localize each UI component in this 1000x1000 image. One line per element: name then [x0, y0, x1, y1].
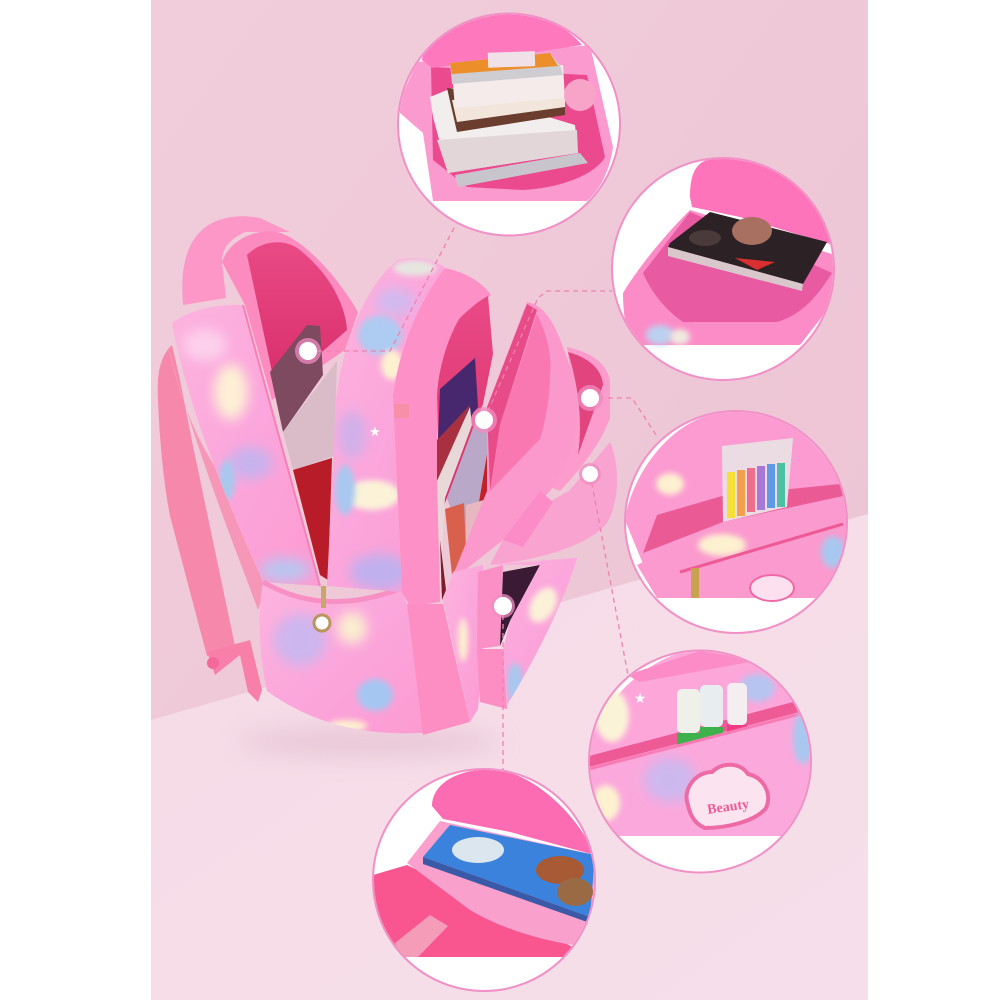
velcro strip — [395, 915, 448, 957]
middle compartment books — [437, 358, 510, 600]
book — [423, 825, 595, 923]
background panel — [151, 0, 868, 1000]
decorative star: ★ — [369, 425, 381, 440]
star: ★ — [634, 691, 646, 707]
pen set — [722, 438, 793, 522]
front compartment opening — [500, 565, 540, 646]
rear compartment — [222, 231, 358, 400]
front compartment rim — [477, 565, 503, 649]
detail circle: main compartment books — [398, 13, 620, 236]
marker dots — [295, 338, 603, 618]
zipper pull — [314, 586, 330, 631]
floor shadow — [240, 728, 500, 756]
detail circle: front pocket book — [373, 769, 595, 991]
logo patch — [687, 765, 768, 828]
front strip — [477, 649, 507, 709]
middle compartment fabric panel — [327, 258, 445, 592]
strap tab — [394, 404, 409, 418]
middle compartment interior — [437, 296, 493, 516]
backpack — [158, 216, 617, 756]
connector lines — [308, 226, 658, 770]
front pocket flap — [490, 442, 617, 565]
rear compartment books — [270, 325, 337, 580]
shoulder strap — [158, 345, 235, 656]
front compartment fabric — [458, 558, 577, 705]
shoulder strap loop end — [207, 657, 219, 669]
rear panel — [172, 305, 320, 586]
detail circle: markers and patch — [589, 650, 813, 872]
detail circle: front compartment magazine — [612, 158, 835, 380]
three marker pens — [677, 683, 747, 746]
detail circle: pen pocket — [625, 411, 848, 633]
stacked books — [430, 88, 578, 173]
outer flap — [540, 347, 610, 491]
body bottom — [407, 604, 470, 735]
logo patch: Beauty — [706, 797, 750, 818]
inner flap — [443, 302, 577, 600]
front compartment side — [443, 565, 483, 722]
flap strap piece — [503, 491, 553, 547]
solid side band — [393, 268, 491, 606]
pocket flap — [432, 769, 595, 855]
lower side pocket — [260, 582, 423, 733]
top handle — [182, 216, 290, 305]
